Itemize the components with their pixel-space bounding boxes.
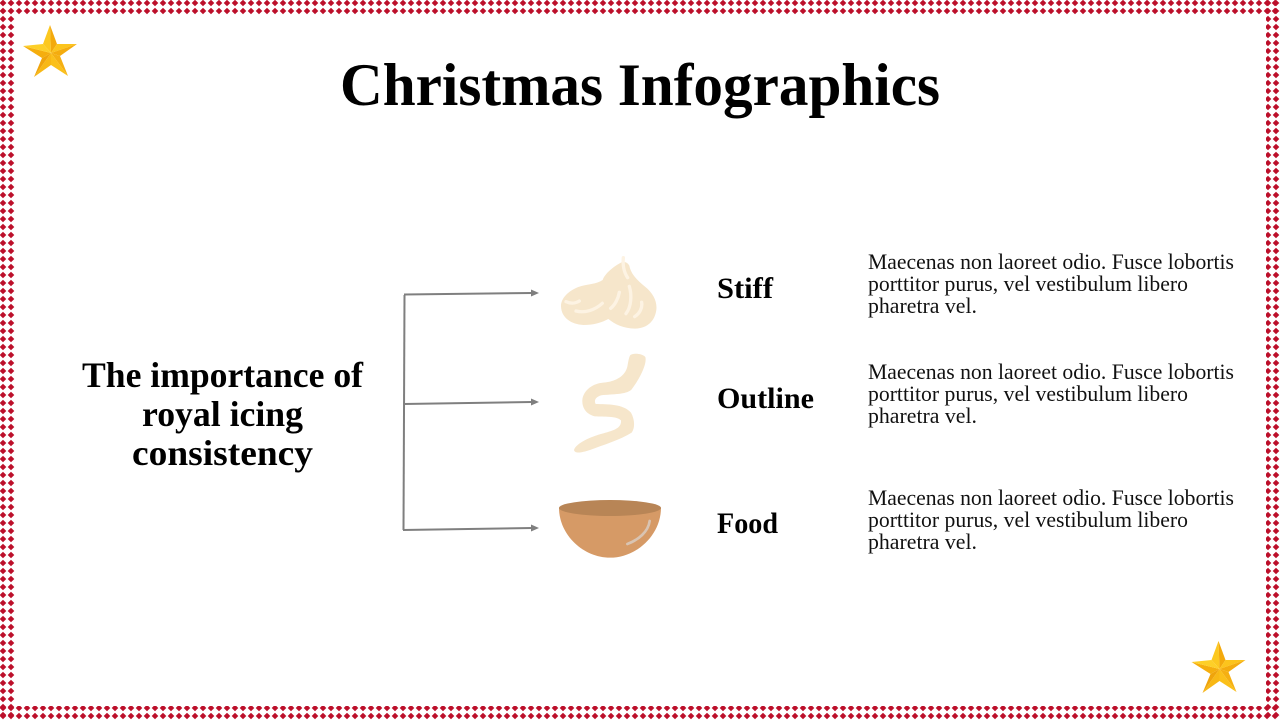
bracket connector with arrows: [403, 290, 539, 532]
text block: food description: Maecenas non laoreet odio. Fusce lobortis: [868, 485, 1234, 510]
icon: outline icing squiggle: [574, 354, 646, 453]
icon: stiff icing dollop: [561, 258, 656, 329]
text block: outline description: porttitor purus, vel vestibulum libero: [868, 381, 1188, 406]
text block: food description: [868, 485, 1234, 554]
icon: mixing bowl: [559, 500, 661, 558]
text block: stiff description: Maecenas non laoreet odio. Fusce lobortis: [868, 249, 1234, 274]
text block: outline description: Maecenas non laoreet odio. Fusce lobortis: [868, 359, 1234, 384]
left heading: the importance of royal icing consistency: royal icing: [142, 394, 303, 434]
text block: stiff description: [868, 249, 1234, 318]
arrow to stiff icon: [404, 290, 539, 296]
icon: gold star bottom right: [1192, 641, 1246, 693]
icon: gold star top left: [23, 25, 77, 77]
text block: stiff description: porttitor purus, vel vestibulum libero: [868, 271, 1188, 296]
left heading: the importance of royal icing consistency: [82, 355, 364, 473]
label: stiff: Stiff: [717, 273, 774, 305]
text block: food description: pharetra vel.: [868, 529, 977, 554]
text block: outline description: pharetra vel.: [868, 403, 977, 428]
left heading: the importance of royal icing consistency: The importance of: [82, 355, 364, 395]
title: Christmas Infographics: [340, 52, 940, 118]
label: outline: Outline: [717, 383, 814, 415]
left heading: the importance of royal icing consistency: consistency: [132, 433, 313, 473]
text block: food description: porttitor purus, vel vestibulum libero: [868, 507, 1188, 532]
label: food: Food: [717, 508, 779, 540]
text block: outline description: [868, 359, 1234, 428]
arrow to food icon: [403, 524, 539, 532]
text block: stiff description: pharetra vel.: [868, 293, 977, 318]
arrow to outline icon: [404, 398, 539, 406]
